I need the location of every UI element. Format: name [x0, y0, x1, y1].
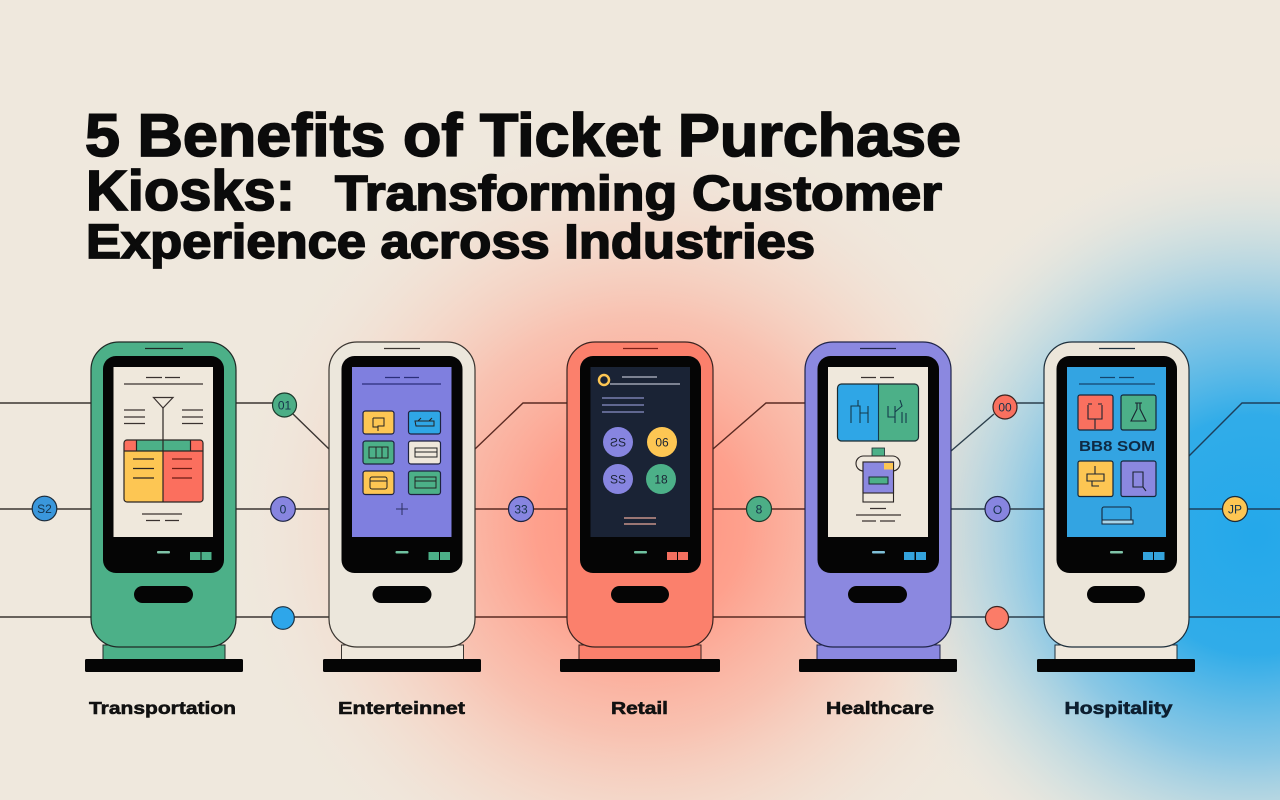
screen: hospitality tiles: [1067, 367, 1166, 537]
label: hospitality: Hospitality: [1064, 698, 1173, 718]
node: green 8: 8: [756, 502, 763, 516]
node: purple 33: 33: [514, 502, 528, 516]
node: red 00: 00: [998, 400, 1012, 414]
node: red plain: [986, 606, 1008, 630]
kiosk: hospitality: [1037, 342, 1195, 672]
screen: ticket map: [114, 367, 213, 537]
kiosk: healthcare: [799, 342, 957, 672]
title: Kiosks:: [86, 159, 295, 223]
node: purple 0: 0: [280, 502, 287, 516]
screen: retail menu: 06: [655, 436, 669, 450]
title: Transforming Customer: [335, 167, 942, 221]
title: 5 Benefits of Ticket Purchase: [85, 102, 961, 169]
kiosk: entertainment: [323, 342, 481, 672]
title: [85, 102, 961, 269]
screen: entertainment tiles: [352, 367, 452, 537]
screen: healthcare panel: [828, 367, 928, 537]
node: blue plain: [272, 607, 294, 629]
screen: retail menu: SS: [610, 472, 626, 486]
label: healthcare: Healthcare: [826, 698, 934, 718]
node: yellow JP: [1222, 496, 1248, 522]
node: blue 52: S2: [37, 502, 52, 516]
screen: hospitality tiles: BB8 SOM: [1079, 438, 1155, 455]
kiosk: transportation: [85, 342, 243, 672]
node: purple O: O: [993, 503, 1002, 517]
node: purple 0: [271, 497, 295, 521]
label: transportation: Transportation: [89, 698, 236, 718]
node: yellow JP: JP: [1228, 502, 1242, 516]
node: purple 33: [508, 496, 534, 522]
node: red 00: [993, 395, 1017, 419]
screen: retail menu: [590, 367, 690, 537]
connector lines: [0, 403, 1280, 617]
label: entertainment: Enterteinnet: [338, 698, 465, 718]
kiosk: retail: [560, 342, 720, 672]
node: green 01: [272, 393, 296, 417]
node: green 8: [746, 496, 772, 522]
label: retail: Retail: [611, 698, 668, 718]
screen: retail menu: 18: [654, 472, 668, 486]
title: Experience across Industries: [86, 216, 815, 269]
node: green 01: 01: [278, 398, 291, 412]
node: purple O: [985, 496, 1010, 522]
node: blue 52: [32, 496, 57, 521]
screen: retail menu: ƧS: [610, 436, 626, 450]
